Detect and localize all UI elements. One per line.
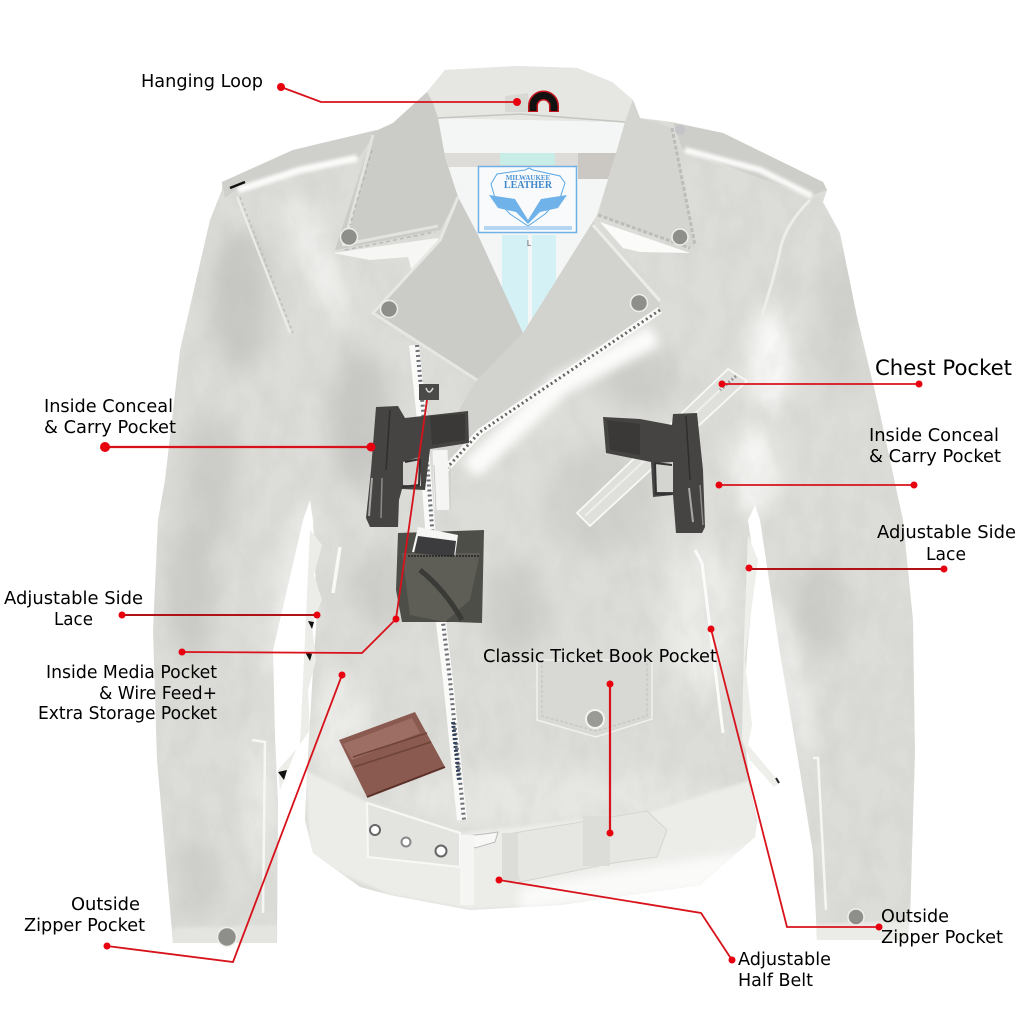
- label: half belt: Adjustable: [738, 950, 831, 970]
- leader: half belt: [499, 880, 732, 960]
- neck interior: [438, 118, 625, 333]
- jacket silhouette: [153, 66, 915, 943]
- label: side lace left: [4, 589, 143, 630]
- label: outside zipper right: [881, 907, 1003, 948]
- leader: side lace left: [122, 614, 317, 616]
- label: media pocket: Extra Storage Pocket: [38, 704, 217, 724]
- right collar: [598, 100, 695, 248]
- right lapel: [436, 222, 660, 470]
- left lapel: [373, 197, 523, 380]
- brand label: L: [527, 239, 532, 248]
- leader: ticket pocket: [609, 684, 611, 833]
- brand label: LEATHER: [504, 180, 553, 191]
- highlight below zipper: [470, 335, 655, 470]
- leader: chest pocket: [722, 383, 919, 385]
- mottled leather texture: [686, 354, 775, 686]
- zipper: [414, 310, 660, 820]
- left collar: [335, 92, 458, 250]
- sleeve cuffs fade: [172, 926, 277, 943]
- label: chest pocket: Chest Pocket: [875, 356, 1012, 380]
- sleeve and body seams: [237, 197, 810, 333]
- label: inside conceal left: Inside Conceal: [44, 397, 173, 417]
- leader: side lace right: [749, 568, 944, 570]
- label: side lace right: Lace: [926, 545, 966, 565]
- left waist pocket: [333, 547, 340, 593]
- icon: hanging loop: [533, 96, 554, 112]
- label: media pocket: Inside Media Pocket: [46, 663, 217, 683]
- label: inside conceal right: [869, 426, 1001, 467]
- label: half belt: [738, 950, 831, 991]
- left sleeve zipper: [252, 740, 265, 913]
- label: inside conceal left: [44, 397, 176, 438]
- tag on zipper: [419, 384, 439, 400]
- label: outside zipper left: [24, 895, 145, 936]
- back collar: [427, 66, 633, 122]
- label: media pocket: [38, 663, 217, 724]
- leader: hanging loop: [281, 87, 517, 102]
- side laces right: [742, 535, 780, 787]
- label: outside zipper right: Outside: [881, 907, 949, 927]
- label: side lace right: [877, 523, 1016, 565]
- label: media pocket: & Wire Feed+: [99, 684, 217, 704]
- brand label: [478, 166, 576, 248]
- chest pocket zipper: [577, 369, 747, 526]
- label: hanging loop: Hanging Loop: [141, 72, 263, 92]
- side laces left: [278, 530, 322, 790]
- icon: right pistol: [603, 413, 705, 533]
- right sleeve zipper: [813, 758, 826, 910]
- marker dots: [100, 83, 948, 964]
- label: side lace left: Adjustable Side: [4, 589, 143, 609]
- shoulder epaulet left: [222, 130, 377, 198]
- label: ticket book pocket: Classic Ticket Book Pocket: [483, 647, 717, 667]
- icon: left pistol: [366, 406, 469, 527]
- snaps: [218, 125, 864, 946]
- icon: wallet: [339, 712, 445, 797]
- label: side lace left: Lace: [54, 610, 93, 630]
- label: outside zipper left: Outside: [71, 895, 140, 915]
- hem band: [305, 770, 760, 910]
- icon: media pouch with phone: [396, 527, 484, 623]
- brand label: MILWAUKEE: [506, 174, 551, 182]
- leader: outside zipper left: [107, 675, 342, 962]
- label: outside zipper right: Zipper Pocket: [881, 928, 1003, 948]
- label: inside conceal left: & Carry Pocket: [44, 418, 176, 438]
- label: half belt: Half Belt: [738, 971, 813, 991]
- white under right collar: [600, 222, 690, 253]
- leader: inside conceal left: [105, 446, 371, 448]
- label: outside zipper left: Zipper Pocket: [24, 916, 145, 936]
- callout lines and markers: [105, 87, 944, 962]
- label: side lace right: Adjustable Side: [877, 523, 1016, 543]
- leader: inside conceal right: [719, 484, 914, 486]
- belt: [367, 803, 667, 905]
- label: inside conceal right: & Carry Pocket: [869, 447, 1001, 467]
- leader: outside zipper right: [711, 629, 879, 927]
- shoulder epaulet right: [673, 123, 827, 196]
- right waist pocket: [695, 550, 723, 733]
- label: inside conceal right: Inside Conceal: [869, 426, 999, 446]
- ticket book pocket: [537, 660, 652, 737]
- leader: media pocket: [182, 400, 427, 653]
- jacket illustration: [150, 60, 920, 950]
- white under left collar: [333, 238, 440, 272]
